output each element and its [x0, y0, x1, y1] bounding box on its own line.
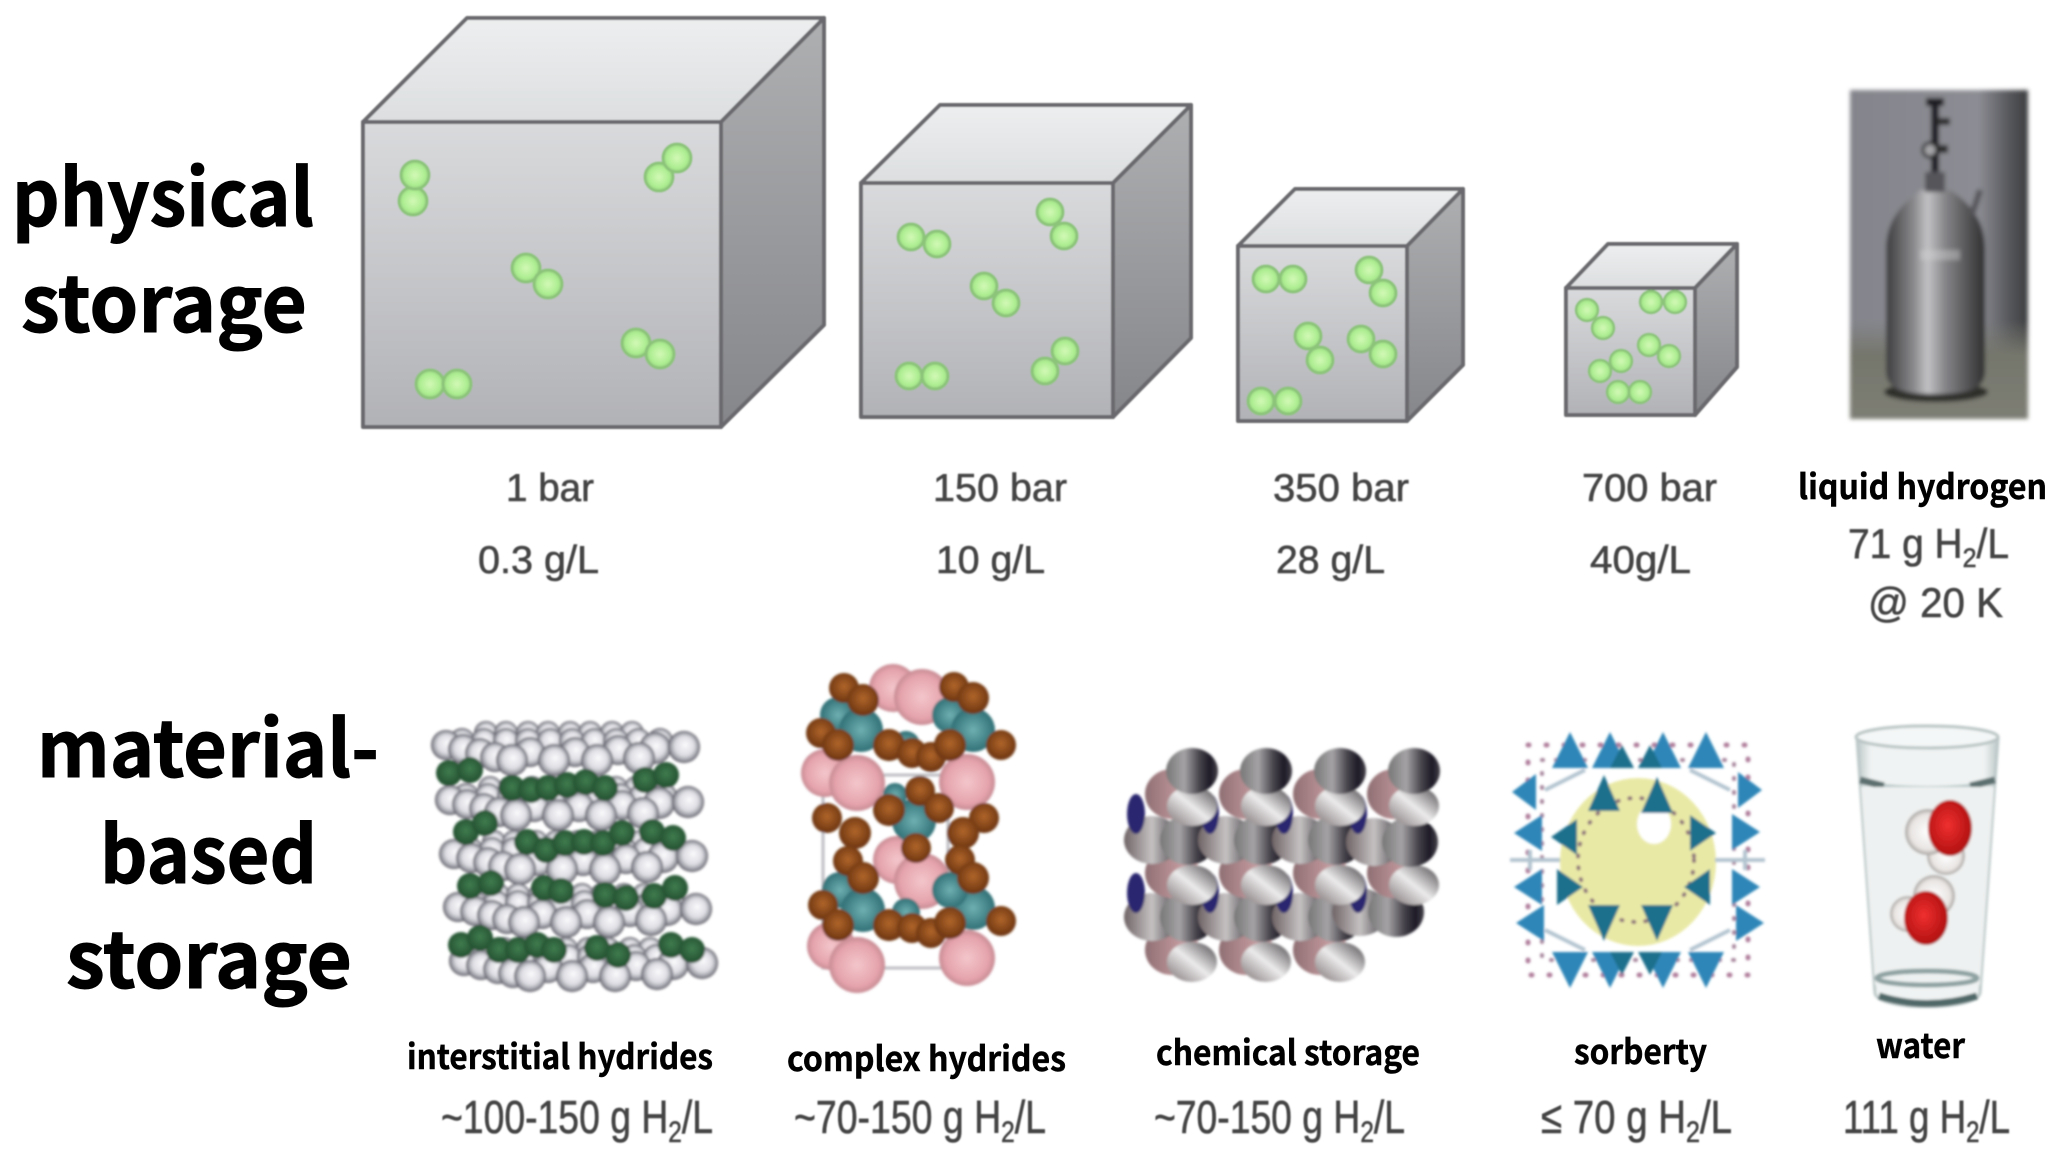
hydrogen molecules in 350 bar cube [1248, 257, 1396, 414]
hydrogen molecules in 700 bar cube [1576, 291, 1686, 403]
cube: 350 bar [1238, 189, 1463, 421]
heading: physical storage [12, 137, 314, 355]
label: chemical storage: 2 [1360, 1116, 1374, 1149]
label: water: 111 g H [1843, 1091, 1997, 1143]
label: 150 bar [933, 467, 1067, 582]
label: sorberty: 2 [1686, 1116, 1700, 1149]
label: sorberty: sorberty [1574, 1025, 1707, 1074]
label: chemical storage: ~70-150 g H [1154, 1091, 1408, 1143]
hydrogen molecules in 1 bar cube [399, 144, 691, 398]
heading: material-based storage: storage [66, 899, 352, 1011]
label: complex hydrides: /L [1015, 1091, 1046, 1143]
label: water: water [1876, 1019, 1965, 1068]
label: 1 bar: 0.3 g/L [478, 539, 599, 582]
label: sorberty: /L [1700, 1091, 1732, 1143]
cube: 150 bar [861, 105, 1191, 417]
label: water: 2 [1966, 1116, 1979, 1149]
label: interstitial hydrides [407, 1030, 713, 1149]
label: sorberty: ≤ 70 g H [1541, 1091, 1715, 1143]
heading: material-based storage [37, 688, 379, 1011]
label: sorberty [1541, 1025, 1732, 1149]
heading: material-based storage: based [100, 794, 317, 906]
label: chemical storage: /L [1374, 1091, 1405, 1143]
label: water [1843, 1019, 2010, 1149]
label: liquid hydrogen [1798, 460, 2047, 626]
label: liquid hydrogen: 2 [1963, 543, 1977, 573]
photo: liquid hydrogen cylinder [1850, 90, 2028, 419]
label: liquid hydrogen: /L [1977, 520, 2009, 567]
water molecule lower [1890, 875, 1955, 945]
label: chemical storage: chemical storage [1156, 1026, 1420, 1075]
label: liquid hydrogen: @ 20 K [1868, 579, 2003, 626]
illustration: glass of water [1856, 726, 1998, 1006]
heading: physical storage: physical [12, 137, 314, 249]
illustration: complex hydrides [801, 664, 1016, 993]
label: complex hydrides [787, 1032, 1066, 1149]
label: water: /L [1979, 1091, 2010, 1143]
label: chemical storage [1154, 1026, 1420, 1149]
label: interstitial hydrides: 2 [668, 1116, 682, 1149]
water molecule upper [1905, 800, 1972, 875]
label: liquid hydrogen: 71 g H [1848, 520, 1972, 567]
label: 150 bar: 150 bar [933, 467, 1067, 510]
label: 350 bar [1273, 467, 1409, 582]
label: 1 bar: 1 bar [506, 467, 594, 510]
cube: 700 bar [1566, 244, 1737, 415]
illustration: interstitial hydrides [431, 721, 718, 992]
heading: material-based storage: material- [37, 688, 379, 800]
label: interstitial hydrides: /L [682, 1091, 713, 1143]
label: complex hydrides: 2 [1001, 1116, 1015, 1149]
label: 700 bar: 40g/L [1590, 539, 1691, 582]
label: 700 bar: 700 bar [1582, 467, 1717, 510]
label: 350 bar: 28 g/L [1276, 539, 1385, 582]
label: complex hydrides: ~70-150 g H [794, 1091, 1048, 1143]
illustration: sorbent cage [1510, 732, 1765, 988]
illustration: chemical storage [1124, 748, 1440, 982]
cube: 1 bar [363, 18, 824, 427]
heading: physical storage: storage [21, 243, 307, 355]
label: 700 bar [1582, 467, 1717, 582]
label: interstitial hydrides: interstitial hydrides [407, 1030, 713, 1079]
label: 1 bar [478, 467, 599, 582]
label: complex hydrides: complex hydrides [787, 1032, 1066, 1081]
label: 350 bar: 350 bar [1273, 467, 1409, 510]
hydrogen molecules in 150 bar cube [896, 199, 1078, 389]
label: interstitial hydrides: ~100-150 g H [441, 1091, 721, 1143]
label: liquid hydrogen: liquid hydrogen [1798, 460, 2047, 509]
label: 150 bar: 10 g/L [936, 539, 1045, 582]
